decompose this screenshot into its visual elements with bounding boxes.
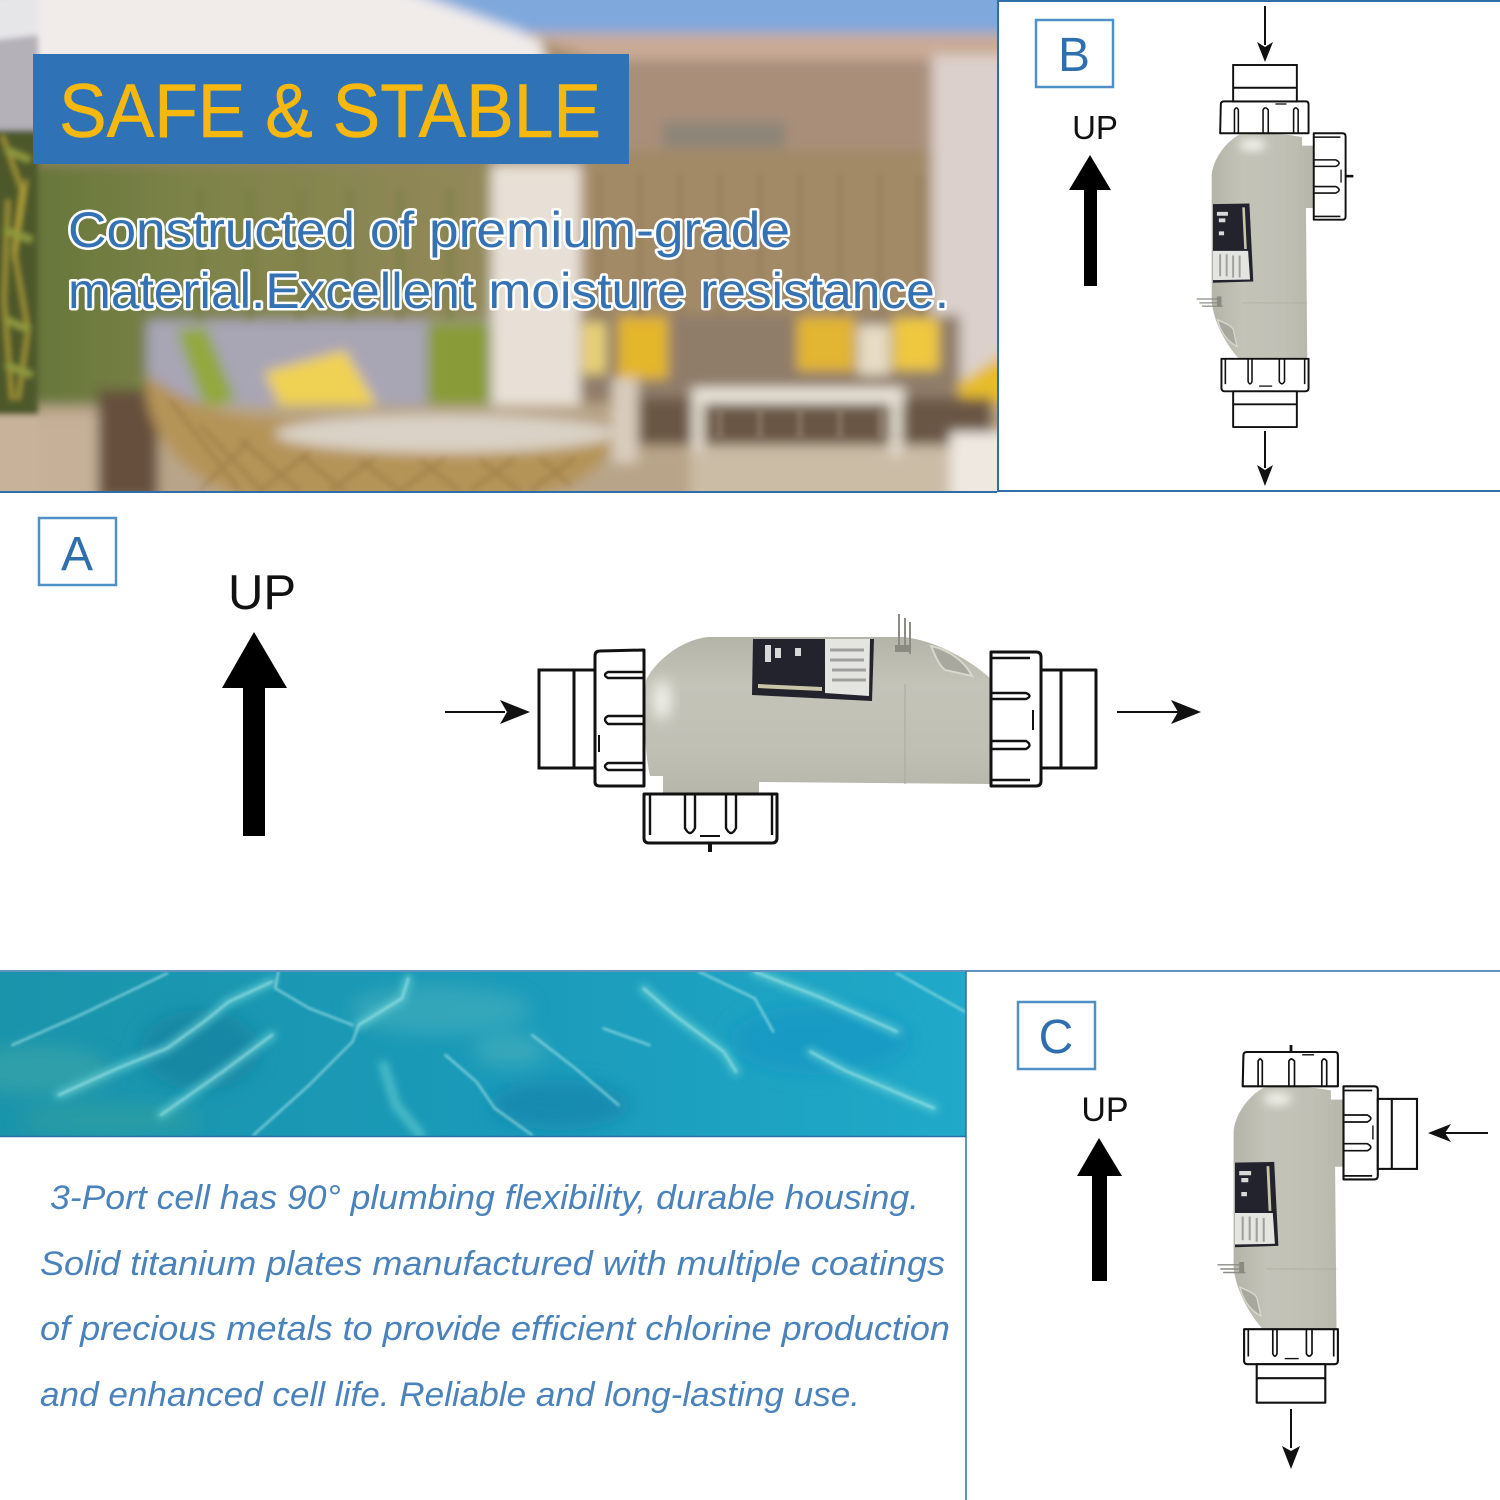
panel: installation A (39, 518, 1201, 852)
arrow: side inlet (1428, 1124, 1488, 1142)
panel divider line under top row (0, 491, 997, 493)
badge C: C (1039, 1011, 1073, 1064)
chlorinator cell, horizontal (539, 614, 1096, 852)
label: UP: UP (1081, 1091, 1129, 1129)
arrow: outlet (1282, 1409, 1300, 1469)
arrow: up direction (222, 632, 287, 836)
photo: wicker weave and wall texture (172, 194, 884, 490)
text block: outlined subtitle (68, 202, 949, 319)
panel: installation C (1018, 1002, 1488, 1469)
text block: outlined subtitle: Constructed of premium-grade (68, 202, 790, 258)
panel: water photo (0, 972, 966, 1136)
badge A: A (61, 528, 93, 581)
chlorinator cell, vertical (1197, 65, 1353, 427)
arrow: up direction (1077, 1138, 1122, 1281)
photo: blurred patio scene (34, 0, 997, 491)
text block: product description: of precious metals to provide efficient chlorine production (40, 1310, 950, 1348)
photo: darker and lighter water patches (0, 986, 910, 1136)
chlorinator cell, vertical with side inlet (1218, 1045, 1417, 1403)
arrow: outlet (1257, 431, 1273, 486)
text block: product description: 3-Port cell has 90° plumbing flexibility, durable housing. (50, 1179, 919, 1217)
photo: water caustics (12, 972, 965, 1135)
arrow: inlet (445, 700, 530, 724)
text block: product description: Solid titanium plates manufactured with multiple coatings (40, 1245, 945, 1283)
text block: product description: and enhanced cell life. Reliable and long-lasting use. (40, 1376, 860, 1414)
text block: outlined subtitle: material.Excellent moisture resistance. (68, 263, 949, 319)
badge B (1036, 20, 1113, 87)
text block: product description (40, 1179, 950, 1414)
arrow: outlet (1117, 700, 1201, 724)
photo: soft caustic glow (59, 972, 934, 1135)
label: UP: UP (228, 566, 296, 620)
banner: blue title background (33, 54, 629, 164)
badge C (1018, 1002, 1095, 1069)
panel: patio photo (0, 0, 997, 491)
panel: installation B (998, 1, 1500, 491)
panel frame B (998, 1, 1500, 491)
badge A (39, 518, 116, 585)
arrow: inlet (1257, 6, 1273, 62)
arrow: up direction (1069, 155, 1111, 286)
badge B: B (1058, 29, 1090, 82)
photo: foliage strip on left edge (0, 0, 38, 505)
panel lines around water photo (0, 971, 1500, 1500)
title: SAFE & STABLE (59, 69, 601, 154)
label: UP: UP (1072, 109, 1118, 146)
